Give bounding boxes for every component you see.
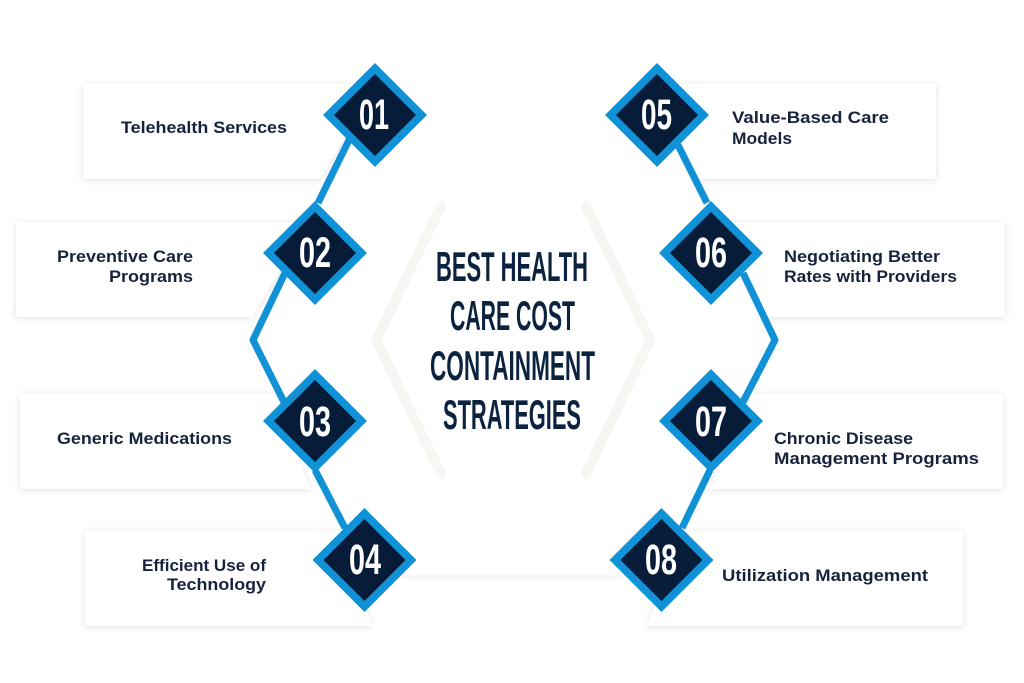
title: BEST HEALTH [436, 243, 588, 290]
panel: Chronic Disease Management Programs [710, 394, 1003, 489]
panel: Telehealth Services: Telehealth Services [121, 118, 287, 137]
badge 04 [312, 508, 416, 612]
title: STRATEGIES [443, 391, 581, 438]
badge 01: 01 [359, 91, 389, 139]
panel: Negotiating Better Rates with Providers: Negotiating Better [784, 247, 940, 266]
panel: Chronic Disease Management Programs: Management Programs [774, 449, 979, 468]
panel: Efficient Use of Technology: Efficient Use of [142, 556, 266, 575]
badge 03 [263, 369, 367, 473]
title: CONTAINMENT [430, 342, 595, 389]
badge 07 [659, 369, 763, 473]
badge 05: 05 [641, 91, 672, 139]
panel: Utilization Management [647, 531, 963, 626]
badge 07: 07 [695, 398, 727, 446]
badge 04: 04 [349, 536, 381, 584]
panel: Value-Based Care Models [657, 84, 936, 179]
panel: Efficient Use of Technology [85, 531, 372, 626]
connector line: right [678, 145, 775, 528]
panel: Efficient Use of Technology: Technology [167, 575, 267, 594]
badge 02: 02 [299, 229, 331, 277]
panel: Preventive Care Programs [16, 222, 315, 317]
title [430, 243, 595, 438]
panel: Value-Based Care Models: Models [732, 129, 792, 148]
central hexagon outline [376, 206, 650, 577]
panel: Chronic Disease Management Programs: Chronic Disease [774, 429, 913, 448]
badge 03: 03 [299, 398, 331, 446]
title: CARE COST [450, 292, 575, 339]
panel: Preventive Care Programs: Programs [109, 267, 193, 286]
panel: Value-Based Care Models: Value-Based Care [732, 108, 889, 127]
badge 06: 06 [695, 229, 727, 277]
panel: Generic Medications: Generic Medications [57, 429, 232, 448]
panel: Utilization Management: Utilization Management [722, 566, 928, 585]
badge 08: 08 [645, 536, 677, 584]
badge 01 [323, 63, 427, 167]
badge 02 [263, 201, 367, 305]
badge 08 [610, 508, 714, 612]
badge 05 [605, 63, 709, 167]
panel: Negotiating Better Rates with Providers: Rates with Providers [784, 267, 957, 286]
connector line: left [253, 138, 350, 528]
panel: Negotiating Better Rates with Providers [711, 222, 1005, 317]
panel: Telehealth Services [83, 84, 375, 179]
badge 06 [659, 201, 763, 305]
panel: Generic Medications [20, 394, 310, 489]
panel: Preventive Care Programs: Preventive Care [57, 247, 193, 266]
